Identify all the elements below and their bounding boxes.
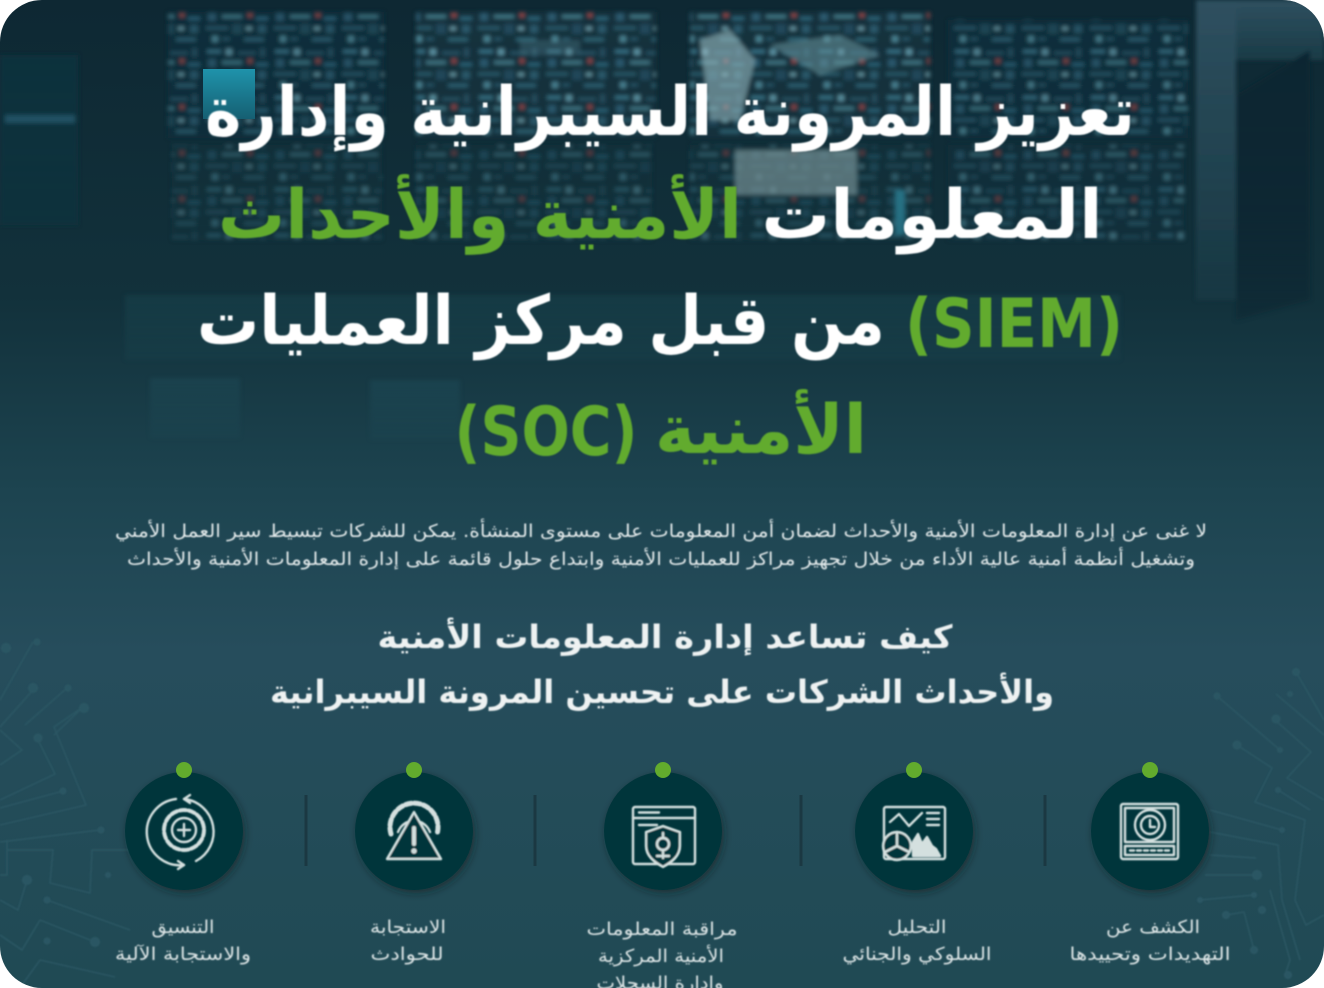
icon: gear in cycle arrows (147, 795, 214, 869)
item: automated orchestration and response (115, 762, 251, 965)
circuit decoration: left (0, 638, 130, 985)
teal screen highlight (203, 69, 255, 119)
label (115, 917, 251, 965)
label (842, 917, 992, 965)
item: incident response (355, 762, 473, 965)
label: التهديدات وتحييدها (1070, 944, 1230, 965)
icon: warning triangle and gear (387, 803, 441, 859)
intro paragraph: وتشغيل أنظمة أمنية عالية الأداء من خلال تجهيز مراكز للعمليات الأمنية وابتداع حلول قائمة على إدارة المعلومات الأمنية والأحداث (127, 547, 1195, 570)
label (1070, 917, 1230, 965)
section heading: والأحداث الشركات على تحسين المرونة السيبرانية (270, 672, 1054, 711)
label: للحوادث (370, 944, 444, 965)
label: الكشف عن (1106, 917, 1200, 938)
dividers (306, 795, 1045, 866)
title (197, 73, 1135, 472)
icon: analytics dashboard (883, 807, 945, 860)
label: الاستجابة (370, 917, 446, 938)
title line 3 green: (SIEM) (905, 285, 1123, 364)
icon: browser with shield (633, 807, 695, 867)
label: التحليل (888, 917, 946, 938)
section heading (270, 617, 1054, 711)
title line 2 green: الأمنية والأحداث (218, 173, 742, 255)
title line 1: تعزيز المرونة السيبرانية وإدارة (205, 73, 1135, 152)
item: central monitoring and log management (586, 762, 738, 988)
label: التنسيق (152, 917, 214, 938)
circuit decoration: right (1197, 668, 1324, 979)
label: مراقبة المعلومات (586, 919, 738, 940)
intro paragraph (115, 518, 1207, 570)
intro paragraph: لا غنى عن إدارة المعلومات الأمنية والأحداث لضمان أمن المعلومات على مستوى المنشأة. يمكن للشركات تبسيط سير العمل الأمني (115, 518, 1207, 542)
section heading: كيف تساعد إدارة المعلومات الأمنية (378, 617, 953, 657)
item: threat detection (1070, 762, 1230, 965)
title line 3 white: من قبل مركز العمليات (197, 282, 885, 361)
title line 4 arabic: الأمنية (655, 388, 867, 470)
icon: radar screen (1121, 804, 1178, 859)
title line 4 latin: (SOC) (454, 393, 638, 472)
label (586, 919, 738, 988)
label (370, 917, 446, 965)
label: الأمنية المركزية (598, 945, 724, 967)
item: behavioural and forensic analysis (842, 762, 992, 965)
label: والاستجابة الآلية (115, 943, 251, 965)
label: السلوكي والجنائي (842, 944, 992, 965)
title line 2 white: المعلومات (762, 176, 1102, 255)
